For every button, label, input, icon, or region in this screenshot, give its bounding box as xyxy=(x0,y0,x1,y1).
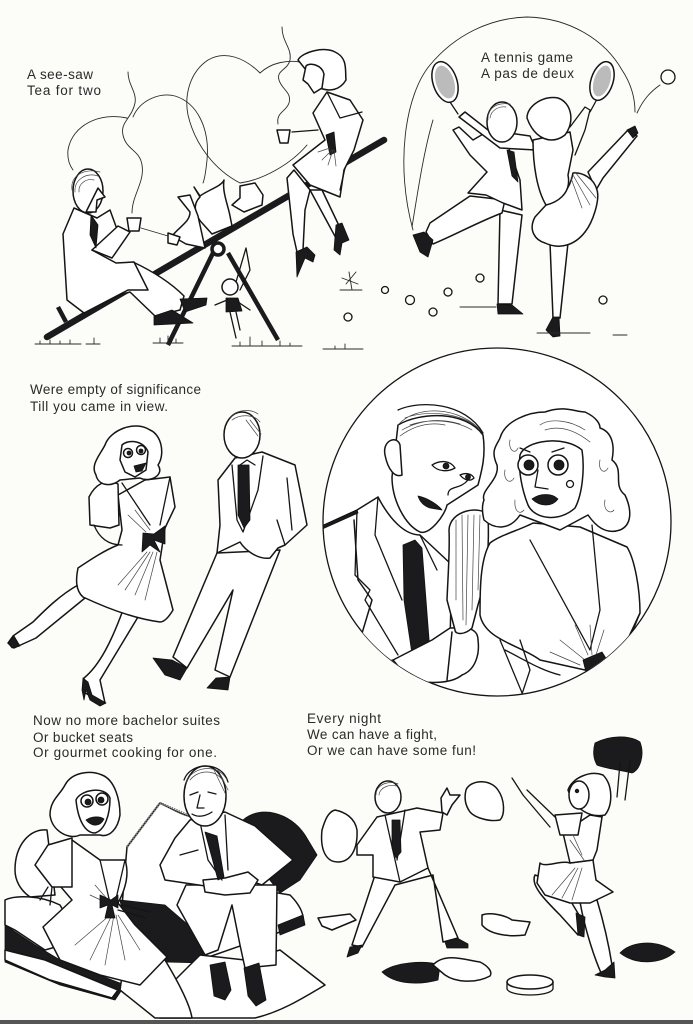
rackets xyxy=(427,58,619,114)
panel: bed scene xyxy=(5,713,325,1018)
caption: canoe: With you xyxy=(429,365,487,380)
panel: circle close-up xyxy=(320,348,671,700)
caption: significance: Till you came in view. xyxy=(30,399,168,414)
caption: canoe xyxy=(429,365,587,397)
flying pillows xyxy=(318,737,675,983)
woman in dress xyxy=(8,426,175,706)
caption: see-saw xyxy=(27,67,101,98)
balls on grass xyxy=(344,274,627,335)
see-saw plank xyxy=(47,140,384,337)
paddle xyxy=(447,510,488,680)
caption: bachelor suites: Or bucket seats xyxy=(33,730,133,745)
caption: see-saw: Tea for two xyxy=(27,83,101,98)
fairy xyxy=(215,248,250,338)
panel: dancing couple xyxy=(8,382,307,706)
circle frame xyxy=(323,348,671,696)
panel: tennis xyxy=(344,17,675,337)
man with pillows xyxy=(347,781,468,957)
man on bed xyxy=(160,766,293,1006)
man close-up xyxy=(320,405,484,700)
man in suit xyxy=(153,411,307,690)
bed back xyxy=(5,803,325,1018)
caption: significance xyxy=(30,382,201,414)
caption: tennis: A pas de deux xyxy=(481,66,574,81)
ball xyxy=(661,70,675,84)
grass and plants xyxy=(35,272,363,349)
caption: every night xyxy=(307,711,476,758)
caption: every night: Or we can have some fun! xyxy=(307,743,476,758)
caption: bachelor suites: Or gourmet cooking for one. xyxy=(33,745,217,760)
man kicking xyxy=(413,102,536,314)
caption: tennis: A tennis game xyxy=(481,50,573,65)
caption: every night: Every night xyxy=(307,711,381,726)
round box xyxy=(507,975,553,995)
woman dancing xyxy=(512,760,630,978)
caption: see-saw: A see-saw xyxy=(27,67,93,82)
woman close-up xyxy=(480,409,640,700)
caption: tennis xyxy=(481,50,574,81)
woman on bed xyxy=(35,772,192,1018)
hearts xyxy=(68,56,307,183)
seated man xyxy=(63,169,207,325)
tea set xyxy=(141,180,263,248)
ball trajectory xyxy=(404,17,660,230)
caption: significance: Were empty of significance xyxy=(30,382,201,397)
panel: see-saw xyxy=(27,27,384,349)
steam xyxy=(123,27,290,213)
panel: pillow fight xyxy=(307,711,675,995)
woman kicking xyxy=(527,97,638,337)
caption: bachelor suites: Now no more bachelor suites xyxy=(33,713,220,728)
caption: bachelor suites xyxy=(33,713,220,760)
woman on see-saw xyxy=(277,50,363,277)
close-up figures xyxy=(320,405,640,700)
see-saw stand xyxy=(168,243,278,345)
caption: canoe: I could paddle a canoe -- xyxy=(429,382,587,397)
caption: every night: We can have a fight, xyxy=(307,727,437,742)
